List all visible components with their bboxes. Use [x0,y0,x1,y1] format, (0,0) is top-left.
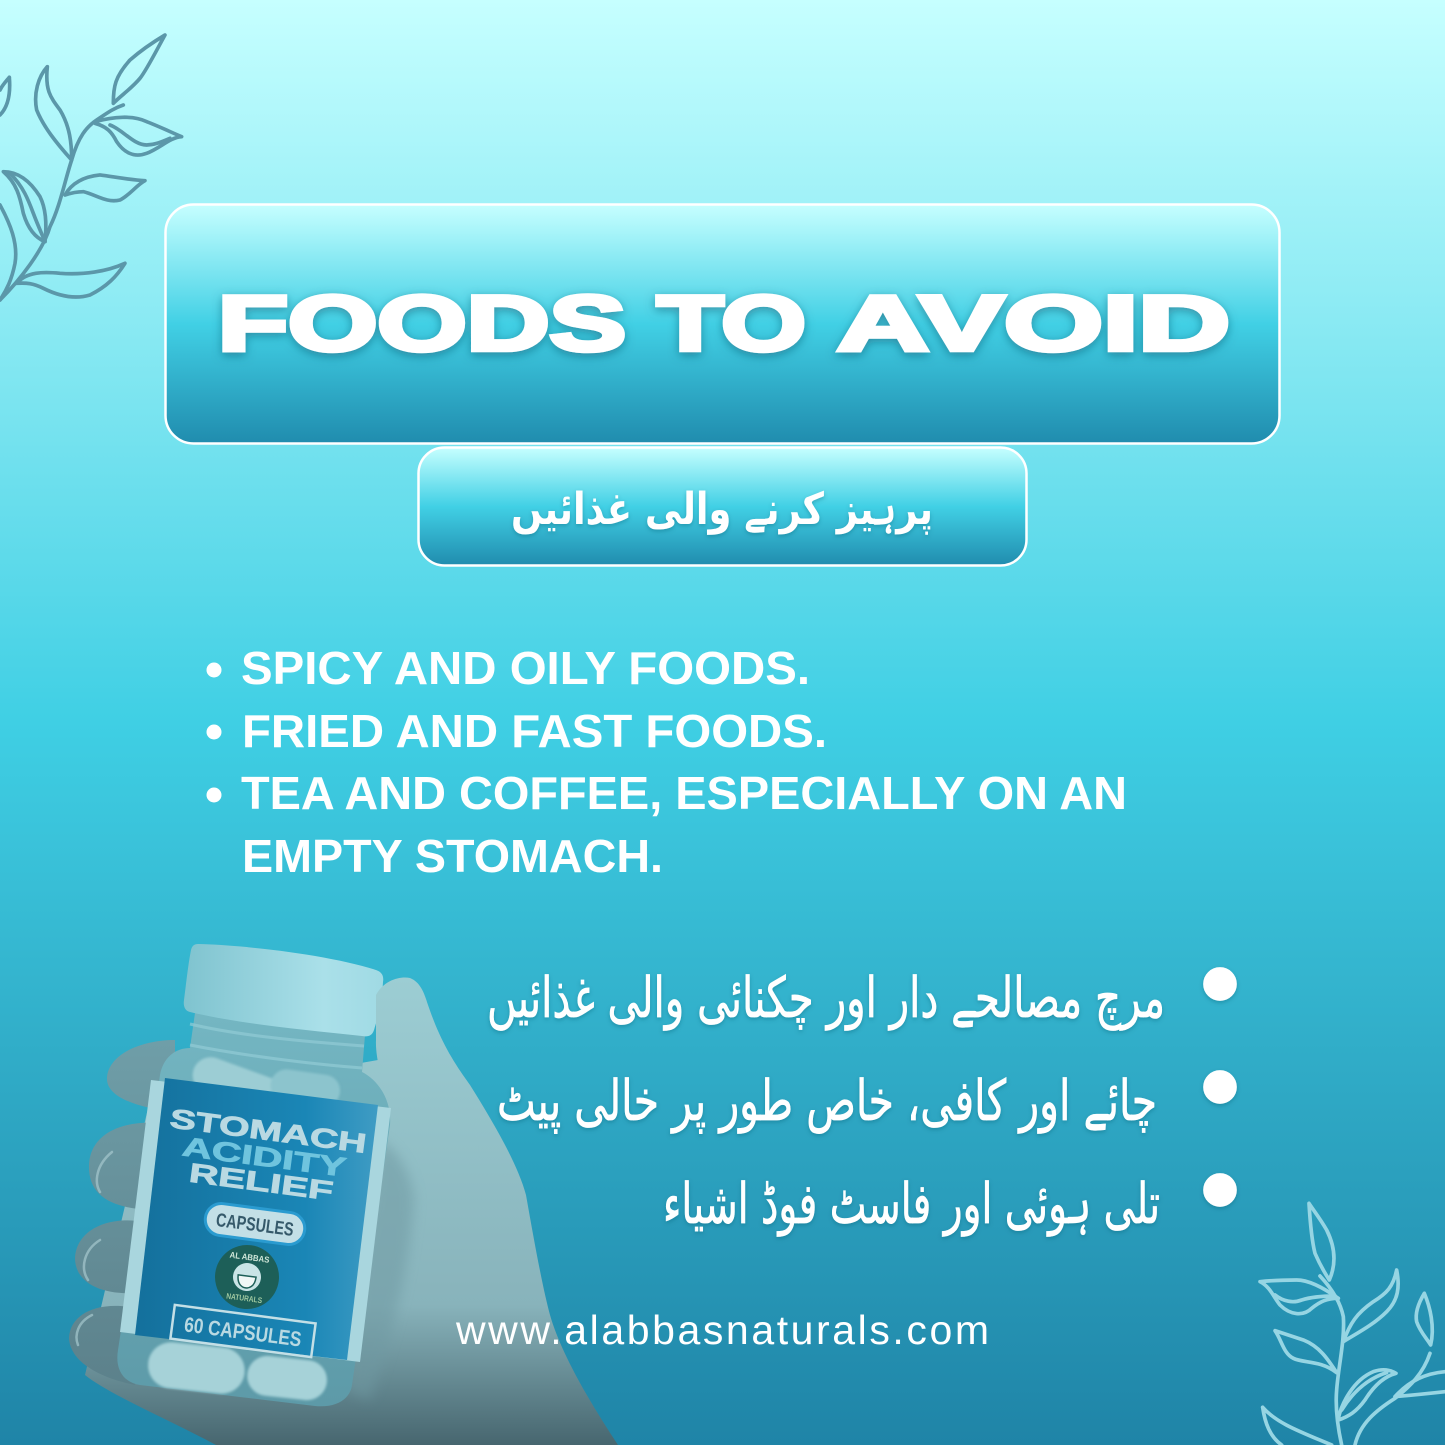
panel: title banner [166,204,1280,444]
icon: leaf branch bottom right [1260,1203,1445,1445]
finger one [107,1040,175,1112]
urdu bullet list [487,966,1236,1237]
capsules pill badge: CAPSULES [215,1210,295,1241]
heading: foods to avoid: TO [657,279,806,367]
brand logo badge [211,1241,283,1313]
urdu subtitle: پرہیز کرنے والی غذائیں [511,484,933,535]
english bullet list: TEA AND COFFEE, ESPECIALLY ON AN [241,767,1127,819]
english bullet list: FRIED AND FAST FOODS. [242,705,827,757]
finger three [75,1220,145,1293]
brand logo badge: AL ABBAS [229,1250,270,1265]
brand logo badge: NATURALS [226,1292,263,1305]
thumb overlapping bottle [376,978,480,1160]
urdu bullet list: چائے اور کافی، خاص طور پر خالی پیٹ [497,1069,1157,1134]
website url: www.alabbasnaturals.com [455,1307,989,1353]
neck ridges [190,1024,364,1068]
palm shadow beside bottle [345,1140,414,1400]
label text relief: RELIEF [187,1158,335,1206]
illustration: hand holding bottle [69,944,618,1445]
heading: foods to avoid [218,279,1230,367]
capsule count box: 60 CAPSULES [183,1313,303,1352]
heading: foods to avoid: AVOID [837,279,1230,367]
english bullet list: SPICY AND OILY FOODS. [241,642,810,694]
bottle jar [117,1013,390,1406]
capsules [146,1052,342,1402]
fingernail highlights [77,1152,112,1345]
finger four [69,1306,135,1385]
label text acidity: ACIDITY [180,1131,348,1183]
english bullet list [206,642,1127,882]
bottle cap [184,944,383,1036]
capsules pill badge [203,1202,307,1246]
heading: foods to avoid: FOODS [218,279,626,367]
urdu bullet list: مرچ مصالحے دار اور چکنائی والی غذائیں [487,966,1165,1031]
urdu bullet list: تلی ہوئی اور فاسٹ فوڈ اشیاء [663,1172,1160,1237]
icon: leaf branch top left [0,35,182,300]
label blue area [135,1078,378,1360]
finger two [89,1123,160,1210]
bottle label [120,1080,391,1362]
hand palm [85,1060,618,1445]
label text stomach: STOMACH [168,1103,368,1159]
english bullet list: EMPTY STOMACH. [242,830,663,882]
panel: urdu subtitle banner [418,448,1026,566]
capsule count box [170,1305,316,1357]
